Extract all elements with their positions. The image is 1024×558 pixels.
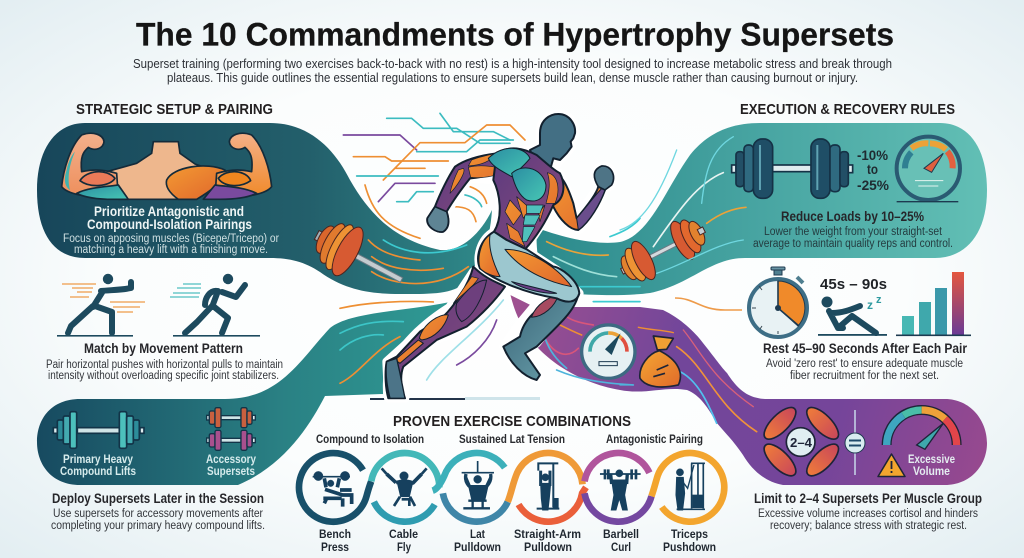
excessive volume label: Excessive <box>908 452 955 466</box>
right pectoral <box>166 166 225 199</box>
speed lines: running figure <box>170 284 201 297</box>
runner: white halo <box>387 114 614 398</box>
heading: strategic setup: STRATEGIC SETUP & PAIRING <box>76 102 273 118</box>
runner: rear thigh muscle <box>456 280 487 322</box>
text: match by movement pattern <box>46 341 283 382</box>
runner: hamstring <box>512 282 557 293</box>
icon: four muscles <box>759 403 843 481</box>
icon: lat pulldown <box>462 461 494 509</box>
right triceps <box>203 185 257 199</box>
runner: chest <box>512 168 546 201</box>
right arm <box>215 133 272 197</box>
neck and torso <box>107 142 227 199</box>
title: The 10 Commandments of Hypertrophy Supersets <box>136 16 894 52</box>
icon: heavy dumbbell <box>732 139 853 198</box>
text: match by movement pattern: intensity without overloading specific joint stabilizers. <box>48 370 279 382</box>
heading: proven exercise combinations: PROVEN EXERCISE COMBINATIONS <box>393 414 631 430</box>
text: prioritize pairings: Compound-Isolation Pairings <box>87 217 252 232</box>
exercise labels: Cable <box>389 527 418 541</box>
category labels: Compound to Isolation <box>316 434 424 446</box>
text: limit supersets: recovery; balance stress with strategic rest. <box>770 520 967 532</box>
ground shadow under runner <box>370 397 540 400</box>
icon: cable fly <box>382 468 427 506</box>
category labels: Antagonistic Pairing <box>606 434 703 446</box>
ring: bench press <box>299 453 371 522</box>
icon: money bag <box>640 336 680 387</box>
text: reduce loads <box>753 209 953 250</box>
percentage labels: -25% <box>857 177 890 193</box>
barbell: right swoosh <box>612 211 714 290</box>
left triceps <box>77 185 128 199</box>
right barbell plates <box>612 211 714 290</box>
runner: rear fist <box>427 207 448 232</box>
text: match by movement pattern: Pair horizontal pushes with horizontal pulls to maintain <box>46 359 283 371</box>
icon: triceps pushdown <box>676 463 705 510</box>
runner figure <box>386 114 614 398</box>
icon: rising bars <box>896 272 971 336</box>
text: prioritize pairings: matching a heavy lift with a finishing move. <box>74 244 268 256</box>
runner: head <box>530 114 575 170</box>
runner: forearm shading <box>577 189 605 230</box>
left bicep <box>80 172 115 186</box>
text: 2-4: 2–4 <box>790 435 813 450</box>
labels: primary and accessory: Compound Lifts <box>60 464 136 478</box>
exercise labels: Lat <box>470 527 485 541</box>
exercise labels: Curl <box>611 540 631 554</box>
decor lines: reduce loads wave <box>620 137 746 273</box>
icon: equals sign <box>845 410 865 475</box>
exercise labels: Fly <box>397 540 411 554</box>
exercise labels: Bench <box>319 527 351 541</box>
text: rest 45-90: fiber recruitment for the next set. <box>790 370 939 382</box>
text: rest 45-90: Avoid 'zero rest' to ensure adequate muscle <box>766 358 963 370</box>
text: prioritize pairings: Focus on apposing muscles (Bicepe/Tricepo) or <box>63 233 279 245</box>
text: prioritize pairings <box>63 204 279 256</box>
text: reduce loads: Lower the weight from your straight-set <box>764 226 943 238</box>
intro text <box>133 56 892 85</box>
heading: execution and recovery: EXECUTION & RECOVERY RULES <box>740 102 955 118</box>
runner: calf front <box>532 295 558 317</box>
runner: rear arm muscles <box>450 153 505 193</box>
bottom dumbbell <box>207 430 255 450</box>
decor lines: purple wave <box>620 327 757 432</box>
text: deploy supersets later: completing your primary heavy compound lifts. <box>51 520 265 532</box>
labels: primary and accessory: Primary Heavy <box>63 452 133 466</box>
runner: rear thigh stripe <box>453 277 478 303</box>
icon: resting figure: z <box>867 298 873 312</box>
category labels <box>316 434 703 446</box>
intro text: plateaus. This guide outlines the essential regulations to ensure supersets build lean, dense muscle rather than causing burnout or injury. <box>167 70 858 85</box>
runner: shoulder <box>488 148 530 177</box>
panel: deploy later wave <box>37 302 450 485</box>
text: match by movement pattern: Match by Movement Pattern <box>84 341 243 356</box>
text: deploy supersets later: Deploy Supersets Later in the Session <box>52 491 264 506</box>
barbell: left swoosh <box>304 211 414 304</box>
ring: triceps pushdown <box>651 453 724 522</box>
labels: primary and accessory: Supersets <box>207 464 255 478</box>
icon: resting figure <box>818 294 887 336</box>
category labels: Sustained Lat Tension <box>459 434 565 446</box>
labels: primary and accessory <box>60 452 256 478</box>
excessive volume label: Volume <box>913 464 950 478</box>
text: deploy supersets later: Use supersets for accessory movements after <box>53 508 263 520</box>
panel: limit volume wave <box>510 293 987 485</box>
icon: accessory dumbbells <box>207 408 255 450</box>
ring: cable fly <box>371 453 439 522</box>
right bicep <box>218 172 251 186</box>
text: limit supersets: Limit to 2–4 Supersets Per Muscle Group <box>754 491 982 506</box>
runner: rear arm <box>427 153 503 232</box>
icon: intensity dial <box>582 325 635 378</box>
runner: front fist <box>594 166 614 190</box>
runner: hip and thigh <box>478 232 579 302</box>
text: rest 45-90 <box>763 341 968 382</box>
text: prioritize pairings: Prioritize Antagonistic and <box>94 204 244 219</box>
icon: resting figure: z <box>876 294 882 306</box>
text: deploy supersets later <box>51 491 265 532</box>
icon: primary heavy barbell <box>53 412 144 448</box>
runner: glute <box>479 235 500 277</box>
text: rest timing: 45s – 90s <box>820 276 887 293</box>
runner: rear leg <box>386 267 505 398</box>
decor: orange squiggle <box>675 298 742 310</box>
panel: reduce loads wave <box>537 123 987 295</box>
text: rest 45-90: Rest 45–90 Seconds After Each Pair <box>763 341 968 356</box>
icon: excessive volume gauge <box>887 410 957 449</box>
ring: barbell curl <box>585 453 651 522</box>
left barbell plates <box>304 211 369 280</box>
percentage labels <box>857 147 890 193</box>
right barbell shaft <box>635 235 691 266</box>
ring: lat pulldown <box>433 453 508 522</box>
percentage labels: -10% <box>857 147 889 163</box>
left forearm stripe <box>65 152 75 190</box>
runner: front arm <box>548 173 605 230</box>
ring: straight-arm pulldown <box>508 453 586 522</box>
exercise labels: Press <box>321 540 349 554</box>
text: reduce loads: Reduce Loads by 10–25% <box>781 209 924 224</box>
icon: load gauge <box>897 137 960 202</box>
left arm <box>62 133 118 197</box>
exercise labels: Pushdown <box>663 540 716 554</box>
exercise labels: Pulldown <box>454 540 501 554</box>
percentage labels: to <box>867 161 878 177</box>
speed lines: pushing figure <box>62 284 145 312</box>
top dumbbell <box>207 408 255 428</box>
runner: calf muscles <box>395 315 448 363</box>
text: limit supersets: Excessive volume increases cortisol and hinders <box>758 508 978 520</box>
icon: running figure <box>173 274 260 337</box>
runner: front shin and foot <box>503 293 578 380</box>
text: limit supersets <box>754 491 982 532</box>
intro text: Superset training (performing two exercises back-to-back with no rest) is a high-intensity tool designed to increase metabolic stress and break through <box>133 56 892 71</box>
icon: pushing figure <box>57 274 133 337</box>
text: reduce loads: average to maintain quality reps and control. <box>753 238 953 250</box>
icon: warning triangle <box>878 454 905 476</box>
exercise chain rings <box>299 453 724 522</box>
panel: antagonistic pairings wave <box>37 123 492 294</box>
exercise labels: Triceps <box>671 527 708 541</box>
labels: primary and accessory: Accessory <box>206 452 256 466</box>
left barbell shaft <box>353 252 403 282</box>
icon: flexing arms <box>62 133 272 199</box>
excessive volume label <box>908 452 955 478</box>
exercise labels: Straight-Arm <box>514 527 581 541</box>
exercise labels <box>319 527 716 554</box>
runner: side muscles and abs <box>505 173 558 247</box>
icon: barbell curl <box>600 469 641 510</box>
speed lines and swooshes <box>340 113 640 385</box>
runner: rear foot <box>386 358 405 398</box>
runner: abdominals <box>522 205 543 242</box>
runner: quad muscle <box>505 249 572 287</box>
exercise labels: Barbell <box>603 527 639 541</box>
runner: torso <box>493 148 563 249</box>
icon: stopwatch <box>749 267 807 337</box>
icon: straight-arm pulldown <box>537 463 559 510</box>
icon: bench press <box>313 471 352 507</box>
exercise labels: Pulldown <box>524 540 572 554</box>
